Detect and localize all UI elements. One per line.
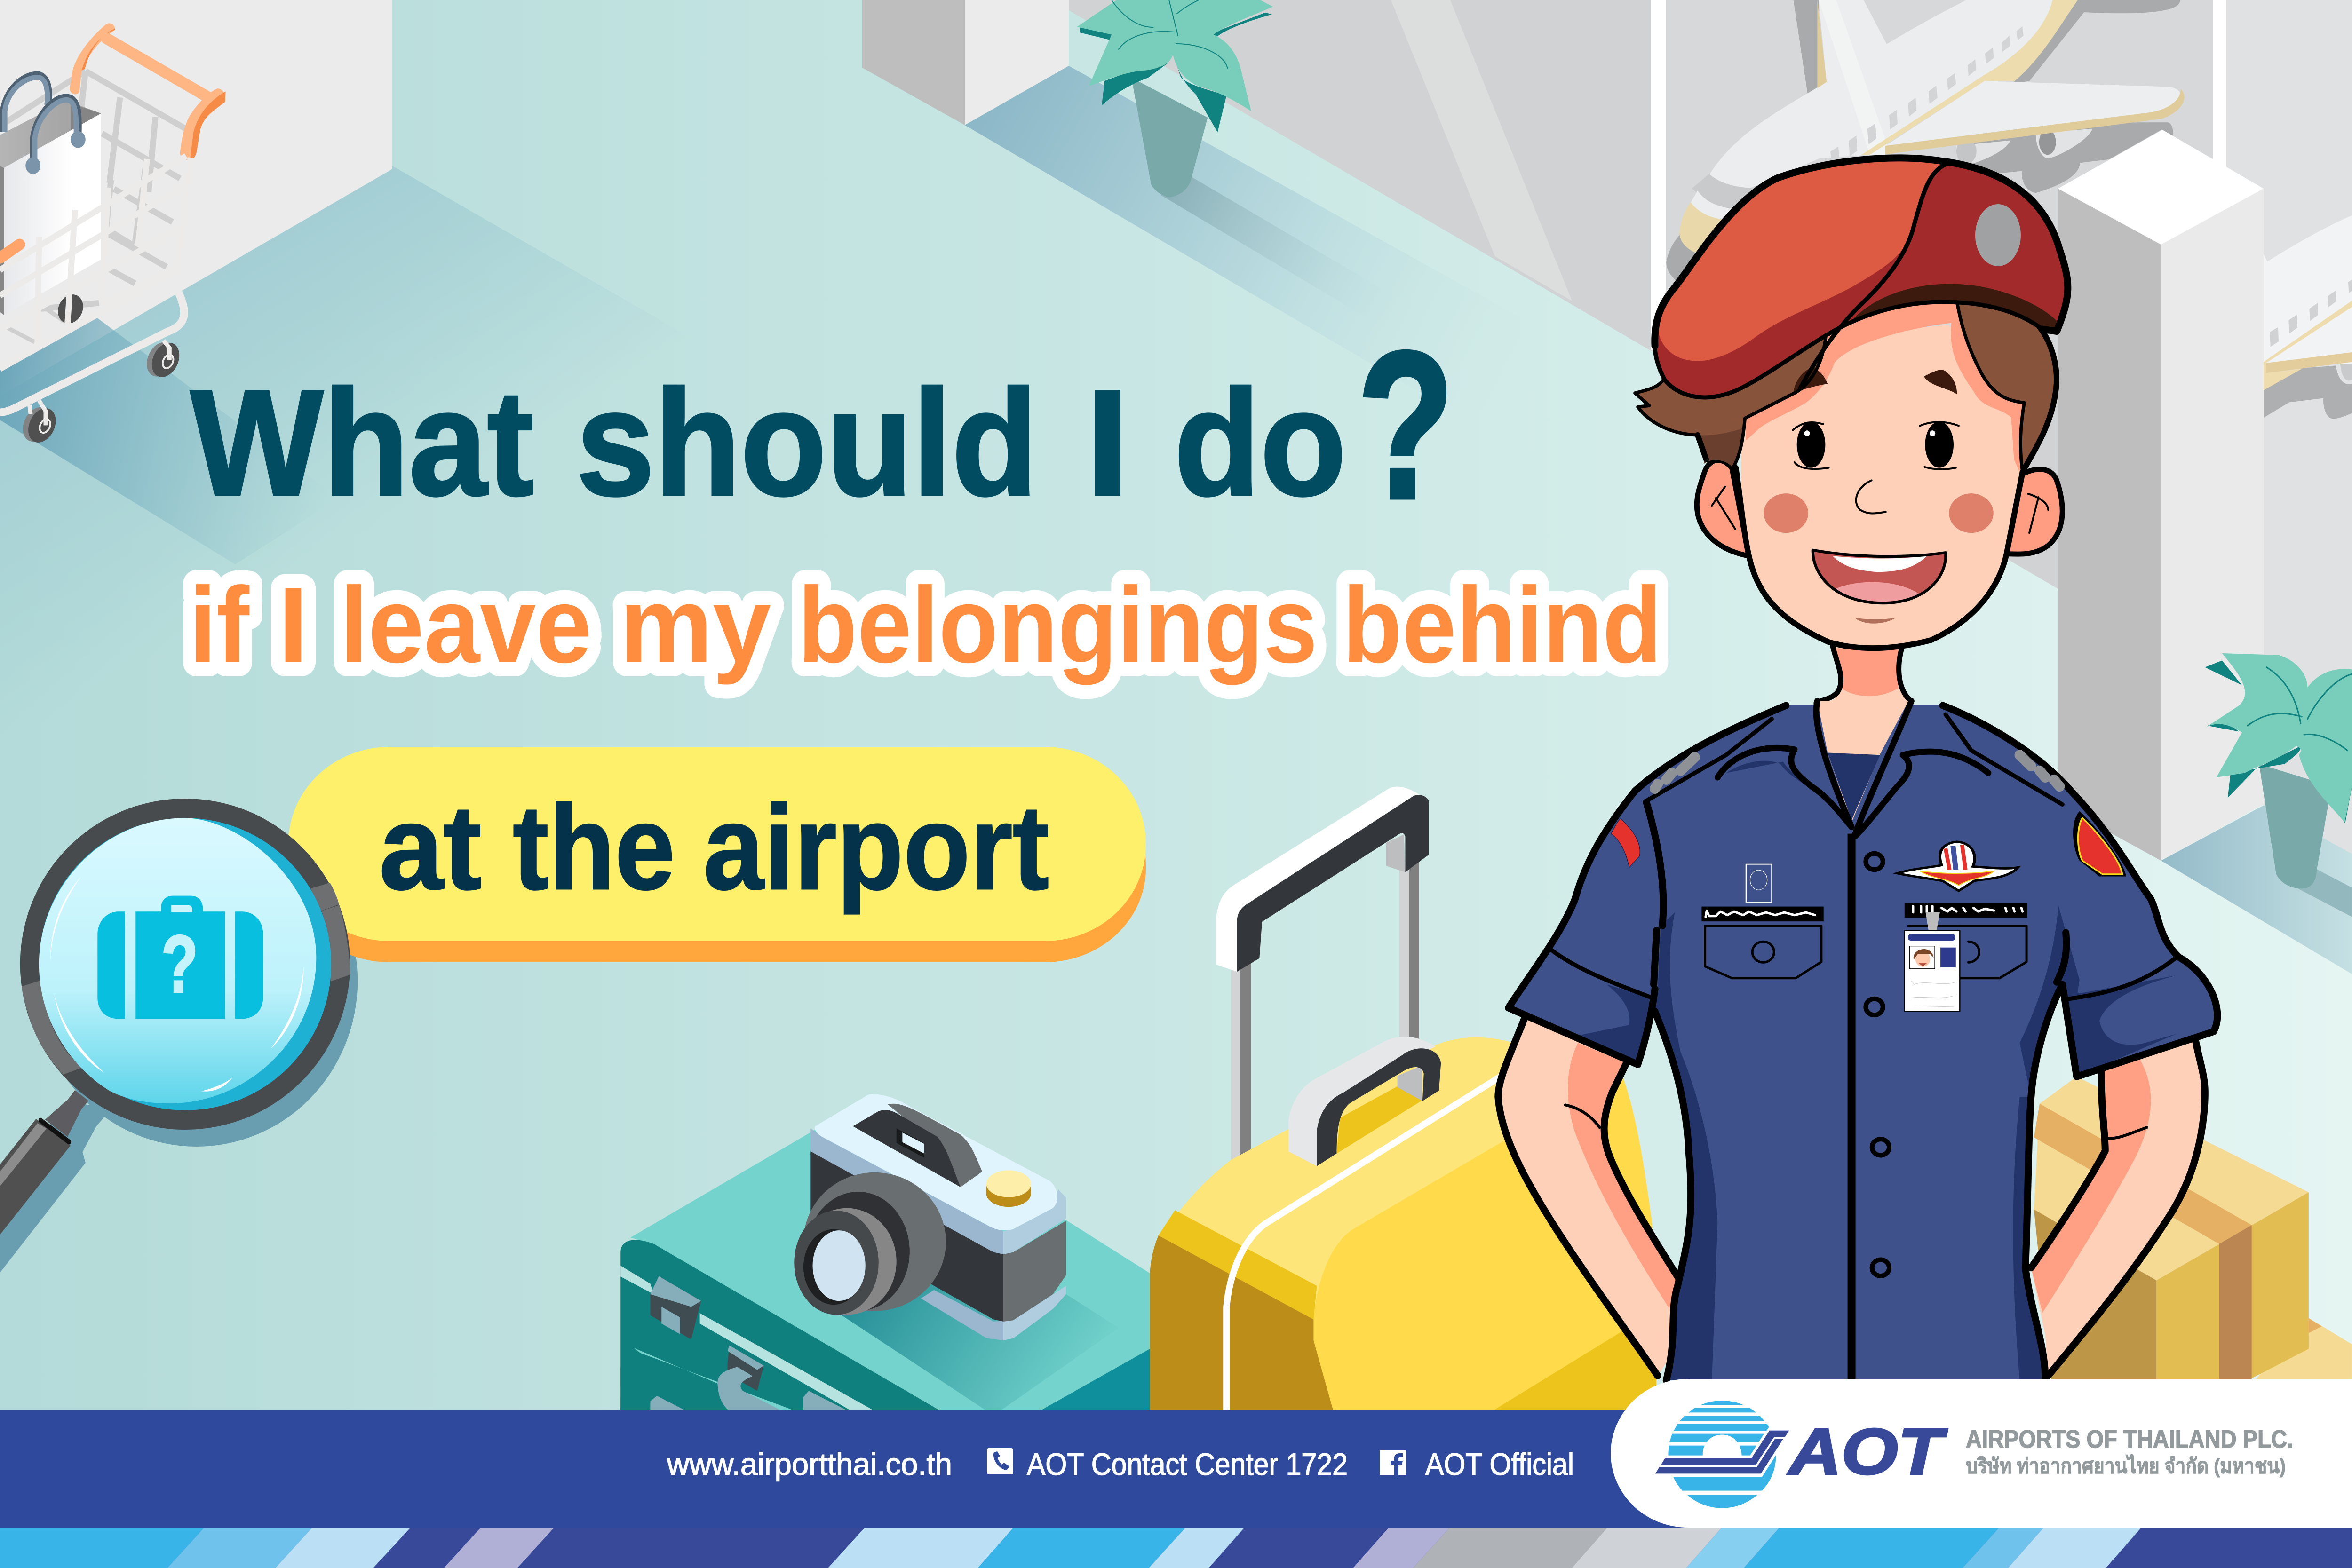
pill label: the bbox=[513, 780, 675, 915]
subtitle: if I leave my belongings behind: behind bbox=[1343, 565, 1662, 685]
contact center: AOT Contact Center 1722 bbox=[1027, 1447, 1348, 1481]
airplane nose bbox=[1666, 174, 1778, 292]
icon: suitcase bbox=[97, 896, 263, 1019]
magnifying glass bbox=[0, 799, 350, 1236]
title: What should I do: I bbox=[1086, 358, 1130, 527]
handle bbox=[0, 1090, 88, 1236]
character: airport officer bbox=[1498, 158, 2217, 1380]
second airplane at right edge bbox=[2263, 215, 2352, 419]
cardboard boxes bbox=[2034, 1077, 2352, 1379]
lens glints bbox=[50, 877, 304, 1092]
uniform shirt bbox=[1509, 701, 2217, 1380]
left pocket and tag bbox=[1701, 864, 1824, 978]
pill label: airport bbox=[703, 780, 1049, 915]
face bbox=[1741, 325, 2023, 648]
telescopic handle of yellow suitcase bbox=[1216, 787, 1429, 1164]
plant: top bbox=[1077, 0, 1273, 198]
teal suitcase bbox=[620, 1097, 1150, 1411]
cheeks bbox=[1764, 493, 1994, 533]
AOT wordmark: AOT bbox=[1788, 1416, 1947, 1488]
AOT logo bbox=[1655, 1401, 1789, 1508]
id card bbox=[1905, 912, 1960, 1011]
subtitle: if I leave my belongings behind: leave bbox=[340, 565, 592, 685]
shirt outlines bbox=[1509, 701, 2217, 1380]
window frames bbox=[1651, 0, 2226, 350]
subtitle: if I leave my belongings behind bbox=[189, 565, 1662, 685]
shopping cart bbox=[0, 23, 226, 447]
subtitle: if I leave my belongings behind: my bbox=[620, 565, 771, 685]
title: What should I do: do bbox=[1174, 358, 1346, 527]
plant: right bbox=[2205, 653, 2352, 888]
subtitle: if I leave my belongings behind: if bbox=[189, 565, 250, 685]
right pocket and tag bbox=[1905, 903, 2027, 978]
company name thai: บริษัท ท่าอากาศยานไทย จำกัด (มหาชน) bbox=[1966, 1454, 2286, 1478]
buttons bbox=[1866, 854, 1889, 1276]
floor shadow of right pillar bbox=[2161, 805, 2352, 974]
footer stripes bbox=[0, 1528, 2352, 1568]
title: What should I do: should bbox=[576, 358, 1038, 527]
airplane through window bbox=[1709, 0, 2184, 193]
subtitle: if I leave my belongings behind: belongings bbox=[798, 565, 1318, 685]
icon: question mark: ? bbox=[161, 919, 198, 1009]
placket bbox=[1848, 834, 1856, 1380]
icon: camera bbox=[794, 1094, 1066, 1340]
footer band bbox=[0, 1410, 2352, 1528]
pill label bbox=[379, 780, 1049, 915]
pill: at the airport bbox=[288, 747, 1146, 962]
pill label: at bbox=[379, 780, 482, 915]
left wall bbox=[0, 0, 392, 396]
eyes bbox=[1793, 421, 1959, 469]
mouth bbox=[1813, 550, 1946, 603]
pillar: right bbox=[2058, 130, 2264, 861]
floor shadow of top pillar bbox=[965, 66, 1693, 470]
yellow suitcase bbox=[1150, 1037, 1657, 1411]
shirt shading bbox=[1575, 761, 2177, 1380]
shoulder patches bbox=[1611, 819, 1640, 867]
beret bbox=[1655, 158, 2068, 397]
icon: facebook bbox=[1380, 1450, 1406, 1475]
hair bbox=[1635, 335, 1826, 468]
neck and head bbox=[1635, 158, 2068, 758]
logo globe stripes bbox=[1668, 1401, 1776, 1508]
icon: phone bbox=[987, 1448, 1013, 1474]
title: What should I do bbox=[191, 358, 1346, 527]
arms bbox=[1498, 1016, 2205, 1376]
wing badge bbox=[1897, 842, 2018, 891]
logo bars bbox=[1655, 1431, 1789, 1473]
magnifier shadow bbox=[0, 816, 358, 1273]
cart floor shadow bbox=[0, 316, 339, 564]
back wall bbox=[1069, 0, 2352, 854]
title: question mark: ? bbox=[1358, 309, 1454, 542]
suitcase grip bbox=[1288, 1037, 1441, 1166]
logo panel bbox=[1611, 1379, 2352, 1528]
facebook name: AOT Official bbox=[1425, 1447, 1574, 1481]
ears bbox=[1697, 460, 1749, 556]
subtitle: if I leave my belongings behind: I bbox=[278, 565, 309, 685]
nose bbox=[1856, 480, 1886, 514]
title: What should I do: What bbox=[191, 358, 534, 527]
floor shade under left wall bbox=[0, 166, 1411, 752]
epaulettes bbox=[1655, 755, 2059, 789]
website: www.airportthai.co.th bbox=[667, 1447, 952, 1481]
company name english: AIRPORTS OF THAILAND PLC. bbox=[1966, 1425, 2293, 1453]
pillar: top centre bbox=[862, 0, 1069, 125]
pot shadow top bbox=[1161, 176, 1435, 339]
